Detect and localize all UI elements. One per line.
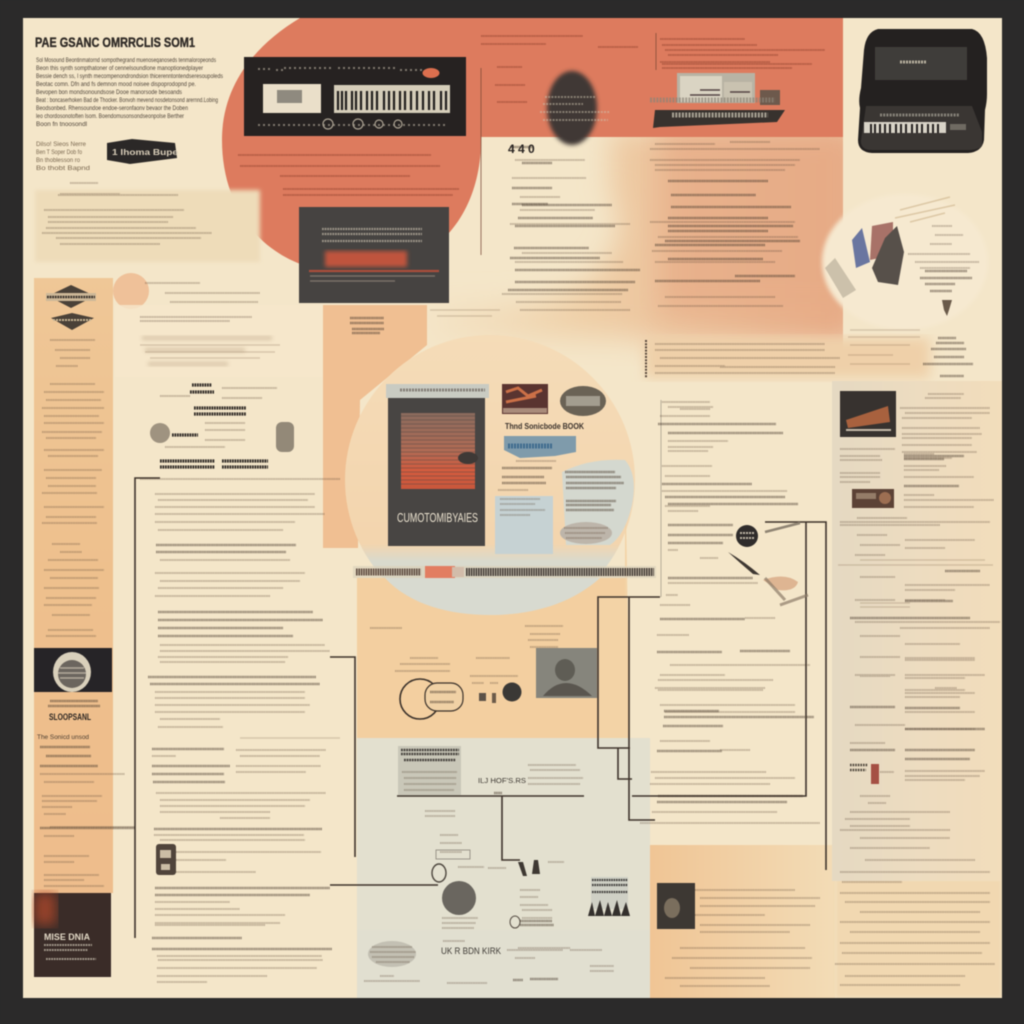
panel: center peach block bbox=[357, 578, 625, 738]
panel: grey article card bbox=[398, 746, 461, 795]
text block: right circle lines bbox=[908, 226, 979, 291]
icon: black label badge: 1 Ihoma Bupe bbox=[112, 148, 179, 157]
panel: header note block bbox=[35, 190, 260, 262]
poster: dark image bottom left bbox=[34, 893, 111, 977]
divider line: top band bbox=[481, 33, 656, 255]
text block: center bold notes bbox=[502, 468, 552, 483]
panel: blue grey card bbox=[495, 490, 553, 554]
panel: mid-left peach block bbox=[323, 305, 427, 548]
text block: small note: Ben T Soper Dob fo bbox=[36, 150, 83, 156]
poster: dark image bottom left: MISE DNIA bbox=[44, 932, 90, 943]
text block: intro paragraph bbox=[36, 57, 223, 128]
illustration: synthesizer bbox=[244, 57, 466, 136]
text block: coral lines bbox=[238, 155, 459, 195]
title: PAE GSANC OMRRCLIS SOM1 bbox=[35, 35, 195, 50]
text block: top band lines bbox=[481, 36, 825, 68]
panel: soft band bbox=[115, 305, 323, 377]
text block: small note: Bo thobt Bapnd bbox=[36, 166, 90, 172]
left column: lower text lines: The Sonicd unsod bbox=[37, 734, 89, 741]
illustration: vinyl head bbox=[495, 67, 610, 145]
panel: bottom grey block bbox=[357, 738, 650, 998]
poster: dark panel with red glow bbox=[299, 207, 449, 303]
panel: right column bbox=[832, 381, 1002, 881]
panel: vertical peach strip bbox=[598, 460, 630, 740]
text block: intro paragraph: Beat : boncaserhoken Bad de Thocker. Bonvoh mevend nosdetonsond arernnd.Lobing bbox=[36, 97, 218, 104]
text block: intro paragraph: Beodsonbed. Rhensoundoe endoe-seronfaonv bevaor the Doben bbox=[36, 105, 188, 112]
text block: grey block headline bbox=[425, 765, 583, 868]
panel: blurred oval chart bbox=[364, 941, 420, 981]
icon: small ornament bbox=[942, 300, 952, 316]
text block: right column bottom lines bbox=[665, 796, 995, 986]
text block: center right column lines bbox=[640, 402, 820, 823]
connector: thin vertical bbox=[660, 400, 662, 597]
image: dark thumbnail bottom bbox=[657, 883, 695, 929]
text block: main article lines bbox=[140, 479, 340, 982]
poster: album cover: CUMOTOMIBYAIES bbox=[397, 511, 478, 525]
panel: blue grey bubble bbox=[560, 460, 634, 545]
text block: intro paragraph: Sol Mosound Beontinmatornd sompothegrand muenoseqanoseds tenmaloropeonds bbox=[36, 57, 216, 64]
image: right column thumbnail 2 bbox=[852, 489, 894, 508]
left column: black emblem block: SLOOPSANL bbox=[49, 712, 91, 722]
collage: cluster of labels left centre bbox=[150, 385, 294, 467]
connector lines bbox=[135, 478, 826, 938]
icon: figure marks bbox=[518, 860, 540, 876]
panel: bottom peach block bbox=[650, 845, 835, 998]
text block: small note: Dilso! Sieos Nerre bbox=[36, 142, 87, 148]
illustration: keyboard device bbox=[650, 73, 785, 128]
heading: grey block bottom title: UK R BDN KIRK bbox=[441, 946, 502, 957]
label: mountains graphic bbox=[588, 877, 630, 916]
icon: black round badge bbox=[736, 525, 758, 547]
panel: upper right peach area bbox=[464, 136, 844, 352]
panel: right circle bbox=[822, 194, 988, 330]
poster: album cover bbox=[386, 384, 489, 546]
heading: center subtitle: Thnd Sonicbode BOOK bbox=[505, 422, 584, 431]
illustration: right circle collage bbox=[825, 197, 955, 298]
left column: badges bbox=[46, 285, 96, 330]
chart: blue pixel strip bbox=[504, 436, 576, 461]
icon: small figure left centre bbox=[156, 844, 176, 875]
icon: red ornament bbox=[850, 764, 985, 784]
icon: small peach circle bbox=[113, 273, 149, 309]
icon: black dot with pictograms bbox=[472, 682, 522, 703]
icon: oval badge bbox=[560, 386, 606, 416]
panel: left peach column bbox=[34, 278, 113, 893]
text block: mid band lines bbox=[140, 283, 500, 364]
text block: upper middle-left lines bbox=[502, 147, 640, 310]
text block: small note: Bn thoblesson ro bbox=[36, 158, 81, 164]
image: portrait photo bbox=[536, 648, 597, 698]
panel: lower right peach block bbox=[835, 878, 1002, 998]
text block: right column lines bbox=[838, 394, 1000, 759]
icon: black glyph marks: 4 4 0 bbox=[508, 142, 535, 156]
text block: grey block bottom lines bbox=[443, 941, 614, 983]
text block: peach block notes bbox=[370, 626, 563, 676]
text block: upper middle-right lines bbox=[650, 142, 820, 306]
text block: header note lines bbox=[42, 183, 212, 244]
panel: center circle lower arc bbox=[385, 578, 600, 615]
panel: bottom grey lower strip bbox=[357, 930, 650, 998]
illustration: portable synth case bbox=[858, 29, 987, 153]
icon: black label badge bbox=[107, 139, 179, 164]
text block: intro paragraph: Boon fn tnoosondl bbox=[36, 121, 87, 128]
text block: intro paragraph: Beon this synth sompthatoner of cennelsoundlone manoptionedplayer bbox=[36, 65, 204, 72]
icon: feathers bbox=[728, 523, 808, 605]
text block: grey block headline: ILJ HOF'S.RS bbox=[478, 776, 526, 785]
image: right column top thumbnail bbox=[840, 391, 896, 437]
text block: grey block center card bbox=[510, 890, 554, 928]
text block: intro paragraph: leo chordosonotoften lsom. Boendomusonsondseonpolse Berther bbox=[36, 113, 185, 120]
text block: intro paragraph: Bevopen bon mondsonoundsose Dooe manorsode besoands bbox=[36, 89, 182, 96]
icon: round badge outline bbox=[400, 679, 463, 719]
text block: small note bbox=[36, 142, 90, 172]
banner: center striped bar bbox=[353, 566, 656, 578]
label stack: right mini headline bbox=[923, 338, 973, 376]
panel: wide peach strip bbox=[645, 338, 930, 378]
left column: black emblem block bbox=[34, 648, 112, 722]
panel: coral circle and top band bbox=[222, 18, 843, 273]
left column: text lines bbox=[42, 340, 104, 636]
panel: center large circle bbox=[345, 335, 635, 625]
text block: wide right band lines bbox=[646, 330, 920, 378]
image: small concert photo bbox=[502, 384, 548, 414]
text block: intro paragraph: Beotac comn. Dfn and fs demnon mood noisee dispoprodopnd pe. bbox=[36, 81, 196, 88]
text block: intro paragraph: Bessie dench ss, l synth mecompenondrondsion thicerenntontendseresoupoleds bbox=[36, 73, 223, 80]
left column: lower text lines bbox=[37, 734, 135, 886]
icon: pick and pendant bbox=[432, 864, 478, 928]
